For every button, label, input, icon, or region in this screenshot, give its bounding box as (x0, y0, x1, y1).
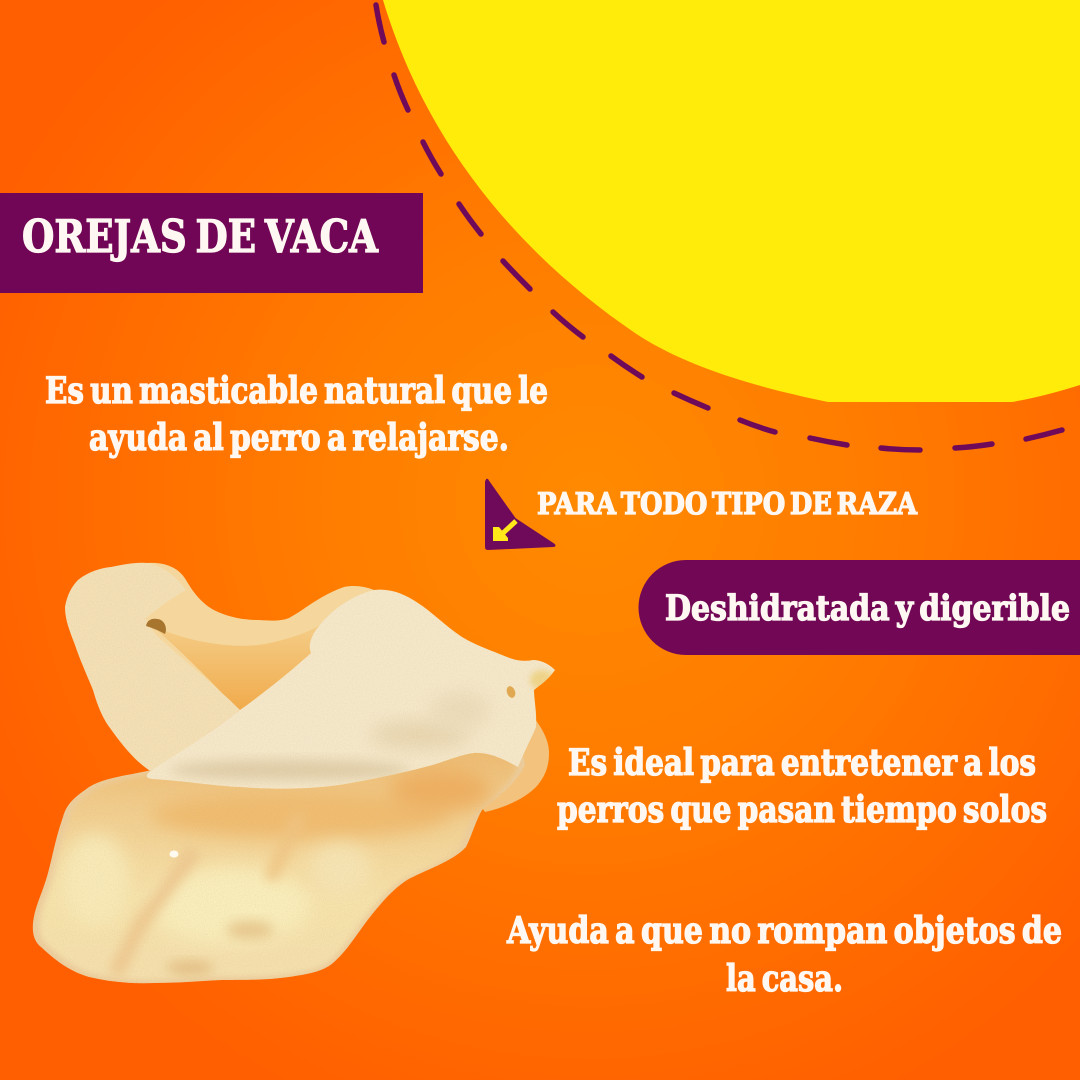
text: masticable natural: Es un masticable natural que le (45, 370, 548, 412)
text: masticable natural: ayuda al perro a relajarse. (89, 417, 509, 459)
ear grain (30, 560, 560, 985)
front ear upper (147, 590, 555, 789)
text: no rompan objetos: la casa. (726, 958, 843, 1000)
dashed curve (376, 5, 1062, 450)
ear hole right (505, 685, 517, 699)
image: cow ears (30, 560, 560, 985)
label: para todo tipo de raza: PARA TODO TIPO DE RAZA (537, 487, 918, 522)
back ear lobe (65, 563, 240, 772)
text: masticable natural (45, 370, 548, 459)
shading on lower ear (39, 744, 517, 980)
small hole (170, 850, 178, 858)
pill: deshidratada y digerible (639, 560, 1080, 655)
text: no rompan objetos (506, 910, 1062, 1000)
back ear inner fold (150, 624, 320, 712)
yellow circle shape (383, 0, 1080, 402)
title banner (0, 193, 423, 293)
title: OREJAS DE VACA (22, 210, 379, 263)
upper ear shading (170, 670, 554, 780)
icon: triangle with arrow (486, 480, 554, 549)
back ear lobe upper band (140, 563, 374, 712)
ear hole detail (146, 619, 166, 634)
back ear right sliver (470, 715, 549, 812)
front ear lower (33, 740, 525, 983)
text: ideal para entretener (557, 742, 1047, 831)
